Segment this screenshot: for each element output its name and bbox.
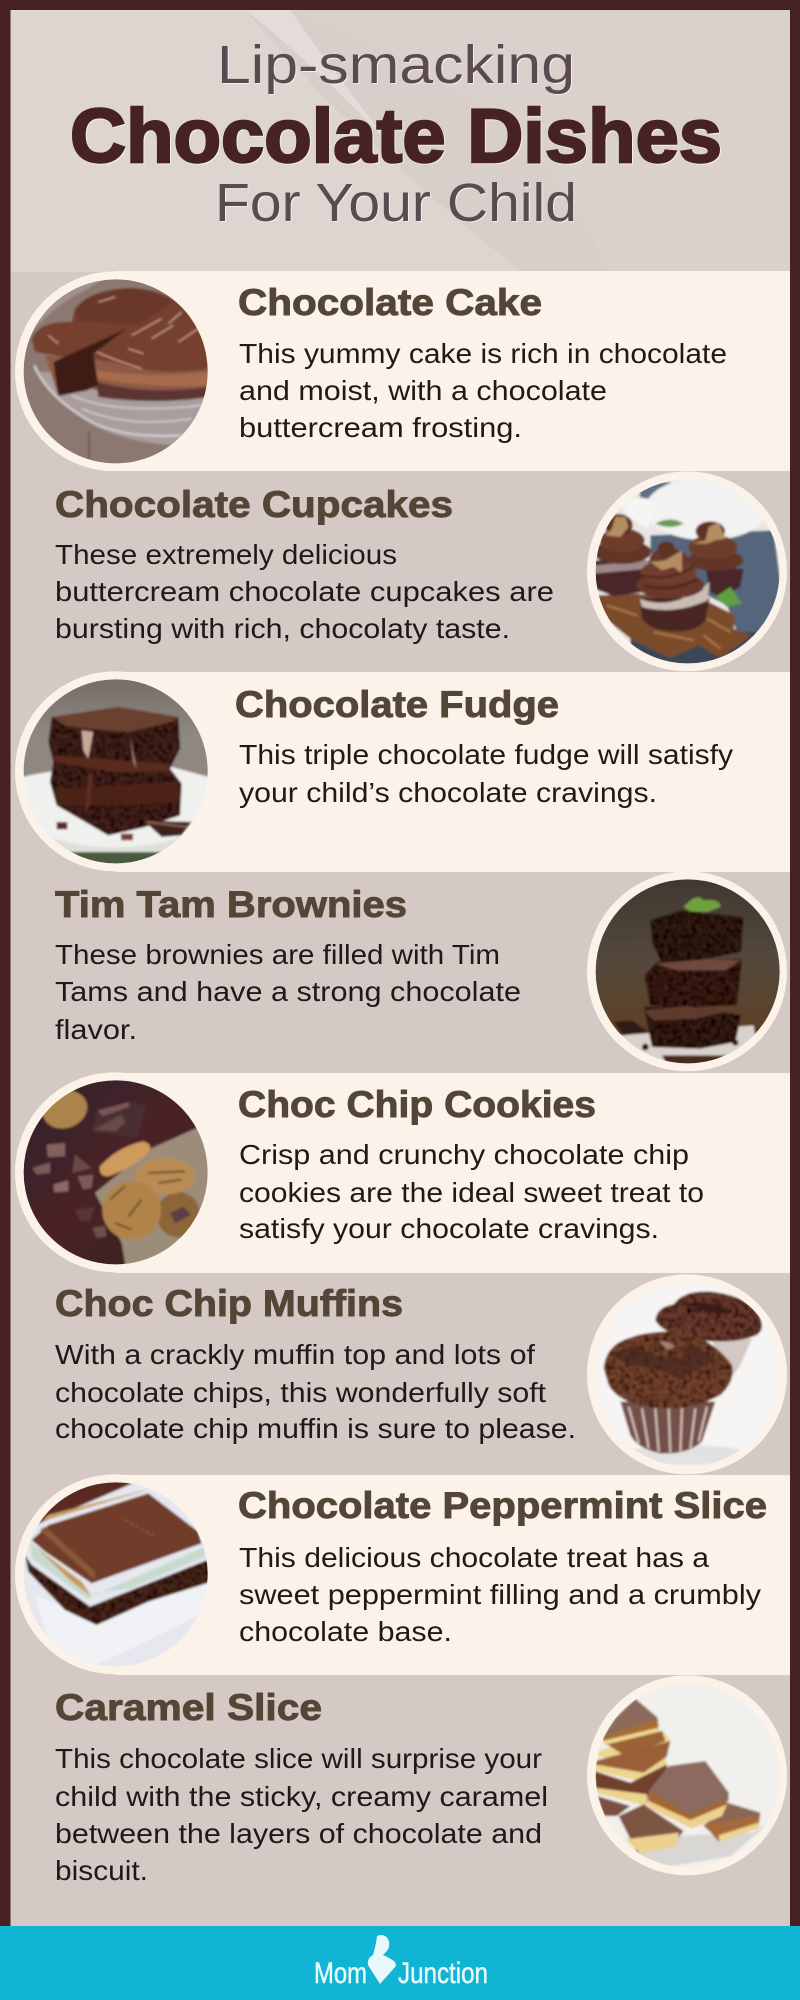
panel: chocolate cupcakes: [10, 471, 790, 672]
description: This delicious chocolate treat has a: [239, 1542, 709, 1573]
icon: mother and child: [368, 1935, 396, 1984]
logo: MomJunction: Mom: [314, 1957, 367, 1990]
description: chocolate base.: [239, 1616, 452, 1647]
description: This yummy cake is rich in chocolate: [239, 338, 727, 369]
description: [55, 1743, 548, 1886]
title: Chocolate Dishes: [70, 94, 722, 179]
header background with swoosh: [10, 10, 790, 272]
description: [55, 939, 521, 1045]
description: This triple chocolate fudge will satisfy: [239, 739, 733, 770]
title: Lip-smacking: [217, 35, 575, 95]
heading: Chocolate Fudge: [235, 684, 559, 725]
image: choc chip muffins: [587, 1274, 787, 1475]
image: chocolate fudge: [15, 671, 215, 872]
description: [55, 1339, 576, 1444]
description: bursting with rich, chocolaty taste.: [55, 613, 510, 644]
description: With a crackly muffin top and lots of: [55, 1339, 535, 1370]
description: [239, 338, 727, 443]
description: [55, 539, 554, 644]
description: These extremely delicious: [55, 539, 397, 570]
description: sweet peppermint filling and a crumbly: [239, 1579, 761, 1610]
image: choc chip cookies: [15, 1072, 215, 1273]
description: flavor.: [55, 1014, 137, 1045]
description: chocolate chips, this wonderfully soft: [55, 1377, 546, 1408]
panel: chocolate fudge: [15, 671, 790, 872]
description: your child’s chocolate cravings.: [239, 777, 657, 808]
heading: Chocolate Peppermint Slice: [238, 1485, 767, 1526]
heading: Caramel Slice: [55, 1687, 322, 1728]
heading: Choc Chip Cookies: [238, 1084, 596, 1125]
description: [239, 1139, 704, 1244]
panel: chocolate cake: [15, 271, 790, 472]
description: between the layers of chocolate and: [55, 1818, 542, 1849]
title: For Your Child: [215, 173, 577, 233]
description: buttercream chocolate cupcakes are: [55, 576, 554, 607]
description: Tams and have a strong chocolate: [55, 976, 521, 1007]
description: [239, 1542, 761, 1647]
title: [70, 35, 722, 233]
description: These brownies are filled with Tim: [55, 939, 500, 970]
description: buttercream frosting.: [239, 412, 522, 443]
image: chocolate peppermint slice: [15, 1474, 215, 1675]
description: and moist, with a chocolate: [239, 375, 607, 406]
image: chocolate cake: [15, 271, 215, 472]
image: caramel slice: [587, 1675, 787, 1876]
description: This chocolate slice will surprise your: [55, 1743, 542, 1774]
description: cookies are the ideal sweet treat to: [239, 1177, 704, 1208]
heading: Tim Tam Brownies: [55, 884, 407, 925]
footer band: [0, 1926, 800, 2000]
panel: caramel slice: [56, 1675, 787, 1880]
panel: chocolate peppermint slice: [15, 1474, 790, 1675]
heading: Chocolate Cake: [238, 282, 542, 323]
description: chocolate chip muffin is sure to please.: [55, 1413, 576, 1444]
heading: Chocolate Cupcakes: [55, 484, 453, 525]
image: chocolate cupcakes: [587, 471, 787, 672]
panel: choc chip muffins: [10, 1273, 790, 1475]
logo: MomJunction: Junction: [398, 1957, 488, 1990]
description: biscuit.: [55, 1855, 148, 1886]
logo: MomJunction: [314, 1935, 488, 1990]
description: Crisp and crunchy chocolate chip: [239, 1139, 689, 1170]
description: [239, 739, 733, 808]
description: satisfy your chocolate cravings.: [239, 1213, 659, 1244]
image: tim tam brownies: [587, 871, 787, 1072]
panel: tim tam brownies: [10, 871, 790, 1073]
description: child with the sticky, creamy caramel: [55, 1781, 548, 1812]
panel: choc chip cookies: [15, 1072, 790, 1273]
heading: Choc Chip Muffins: [55, 1283, 403, 1324]
